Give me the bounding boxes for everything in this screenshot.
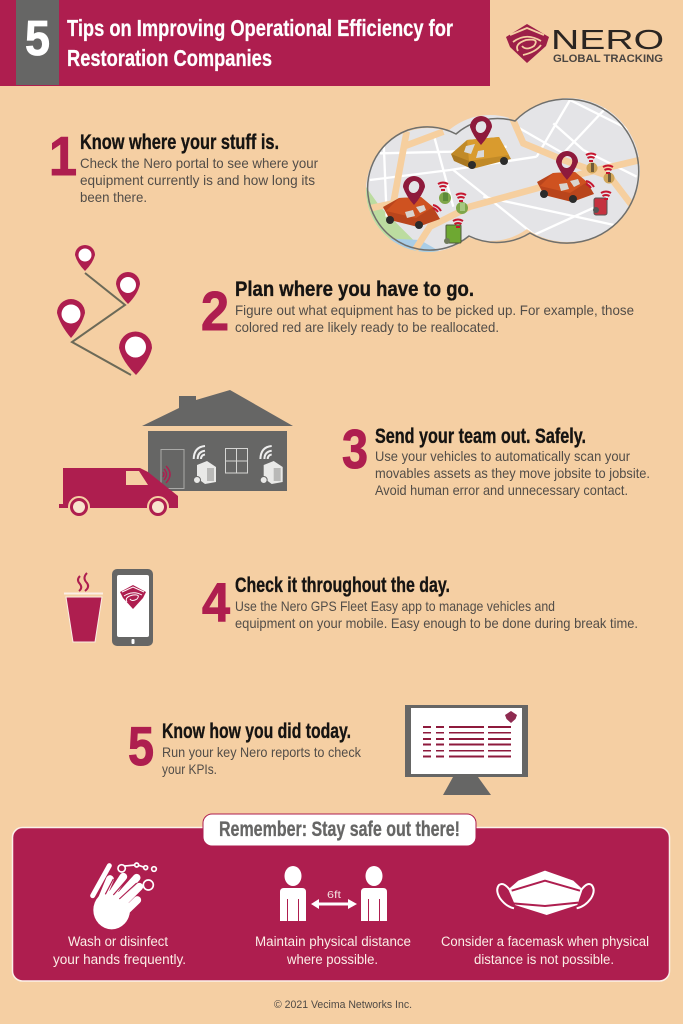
van: red, left [383,197,440,229]
van: red, right [537,172,594,203]
title: Tips on Improving Operational Efficiency for [67,15,453,41]
mini logo [505,711,517,723]
title: Restoration Companies [67,45,272,71]
distance arrow [311,899,357,909]
header banner [0,0,490,86]
safety heading [203,814,476,846]
caption: facemask [441,934,649,967]
tip 5 text: your KPIs. [162,762,217,777]
window [226,448,248,473]
map pins [403,116,578,205]
tip 2 text: Figure out what equipment has to be picked up. For example, those [235,303,634,318]
person right [361,866,387,921]
title [67,15,453,71]
tip 3 text: Use your vehicles to automatically scan your [375,449,630,464]
logo: Nero Global Tracking [506,24,664,65]
tip 1 number: 1 [49,125,77,187]
van [59,468,178,508]
tip 4 text: Check it throughout the day. [235,574,450,597]
equipment 2 [260,446,283,484]
tip 2 number: 2 [201,280,229,342]
pin 2 [116,272,140,304]
safety panel [12,814,670,981]
route with map pins [57,245,152,375]
tip 3 number: 3 [342,418,368,480]
tip 1 text: equipment currently is and how long its [80,173,315,188]
pin 1 [75,245,95,271]
caption: wash hands [53,934,186,967]
tip 4 text: Use the Nero GPS Fleet Easy app to manage vehicles and [235,599,555,614]
caption: distance: Maintain physical distance [255,934,411,949]
caption: wash hands: Wash or disinfect [68,934,168,949]
header number 5: 5 [25,12,50,66]
tip 2 text: Plan where you have to go. [235,278,474,301]
logo wordmark: NERO [551,24,664,55]
phone icon [112,569,153,646]
tip 2 text: colored red are likely ready to be reallocated. [235,320,499,335]
tip 3 text [375,425,650,498]
tip 5 text: Run your key Nero reports to check [162,745,361,760]
house [142,390,293,426]
icon: washing hands [93,863,156,929]
tip 3 text: Send your team out. Safely. [375,425,586,448]
tip 4 text: equipment on your mobile. Easy enough to be done during break time. [235,616,638,631]
equipment 1 [194,446,216,484]
house and van illustration [59,390,293,517]
route line [72,273,131,375]
tip 1 text: Check the Nero portal to see where your [80,156,318,171]
tip 3 text: movables assets as they move jobsite to jobsite. [375,466,650,481]
report rows [423,726,511,758]
caption: distance [255,934,411,967]
safety heading: Remember: Stay safe out there! [219,818,460,841]
van: orange, top [451,137,511,169]
caption: facemask: distance is not possible. [474,952,614,967]
person left [280,866,306,921]
tip 1 text: Know where your stuff is. [80,131,279,154]
tip 3 text: Avoid human error and unnecessary contact. [375,483,628,498]
tip 1 text: been there. [80,190,147,205]
coffee cup icon [64,573,103,642]
caption: distance: where possible. [286,952,378,967]
tagged equipment [439,162,614,244]
pin 3 [57,299,85,338]
wifi signals [433,154,613,227]
door [161,450,184,488]
van signal [163,466,170,483]
caption: facemask: Consider a facemask when physical [441,934,649,949]
monitor with report [405,705,528,795]
distance label: 6ft [327,890,341,901]
tip 4 number: 4 [202,571,230,633]
icon: face mask [497,871,594,915]
tip 5 text [162,720,361,777]
caption: wash hands: your hands frequently. [53,952,186,967]
tip 4 text [235,574,638,631]
logo tagline: GLOBAL TRACKING [553,53,663,65]
tip 5 number: 5 [128,715,154,777]
icon: Nero shield [506,24,549,63]
tip 1 text [80,131,318,205]
pin 4 [119,332,152,375]
map illustration [366,98,640,252]
footer copyright: © 2021 Vecima Networks Inc. [274,999,412,1011]
tip 5 text: Know how you did today. [162,720,351,743]
tip 2 text [235,278,634,335]
icon: two people six feet apart [280,866,387,921]
